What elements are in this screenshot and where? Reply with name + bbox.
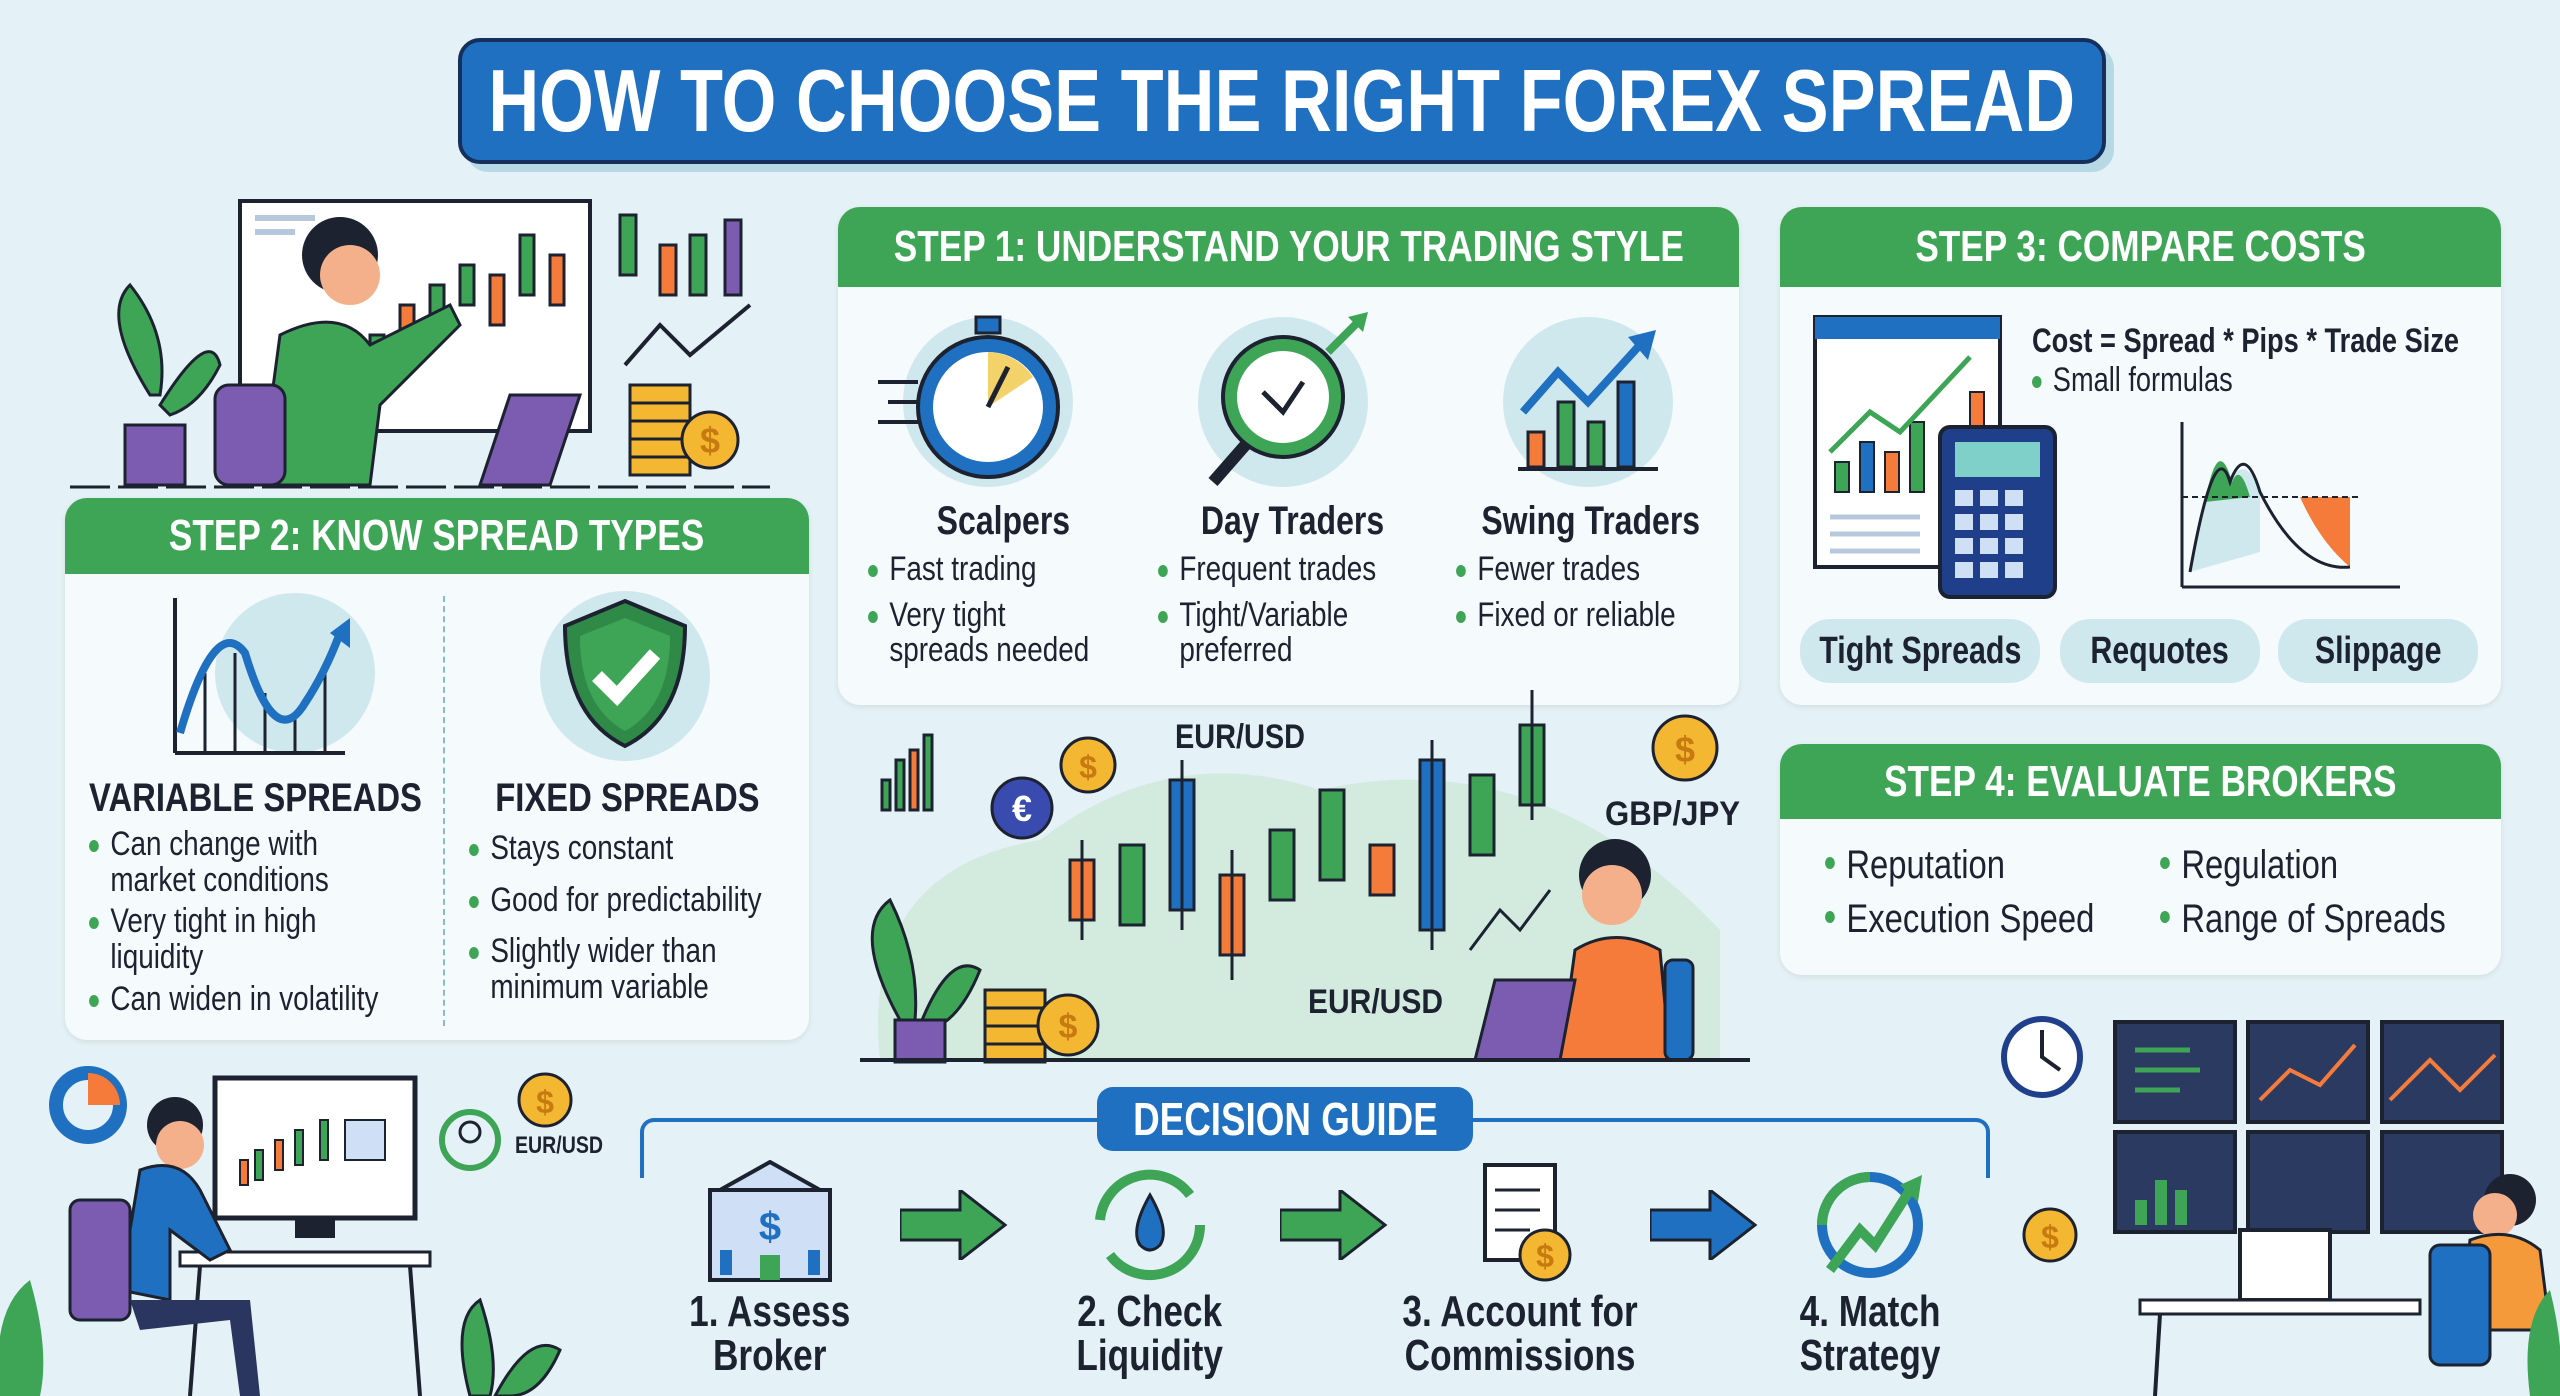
- step 1 header: STEP 1: UNDERSTAND YOUR TRADING STYLE: [893, 222, 1684, 271]
- text: day traders: Day Traders: [1201, 499, 1385, 543]
- icon: clock magnifier: [1198, 312, 1368, 487]
- illustration: central candlestick scene: $: [1675, 729, 1695, 770]
- text: variable spreads: [89, 776, 422, 1018]
- text: variable spreads: Can widen in volatility: [110, 980, 378, 1018]
- decision guide bracket: [640, 1118, 1990, 1178]
- pill: tight spreads: Tight Spreads: [1819, 630, 2021, 672]
- illustration: central candlestick scene: $: [1079, 749, 1097, 785]
- icon: fixed spread shield: [540, 591, 710, 761]
- title: HOW TO CHOOSE THE RIGHT FOREX SPREAD: [489, 51, 2075, 150]
- decision guide label: [1097, 1087, 1473, 1151]
- decision step 4 match strategy: [1800, 1172, 1940, 1380]
- text: fixed spreads: Good for predictability: [490, 881, 762, 919]
- pill: requotes: [2060, 619, 2260, 683]
- text: broker criteria: Reputation: [1846, 843, 2005, 887]
- pill: requotes: Requotes: [2091, 630, 2229, 672]
- step 3 header: STEP 3: COMPARE COSTS: [1915, 222, 2366, 271]
- text: cost formula: Cost = Spread * Pips * Trade Size: [2032, 322, 2459, 360]
- pill: tight spreads: [1800, 619, 2040, 683]
- text: cost formula: Small formulas: [2053, 361, 2233, 399]
- illustration: trader at chart board top-left: $: [700, 420, 720, 461]
- illustration: bottom-left trader at desk: $: [536, 1084, 554, 1120]
- illustration: central candlestick scene: [860, 690, 1750, 1064]
- pill: slippage: [2278, 619, 2478, 683]
- step 2 header: STEP 2: KNOW SPREAD TYPES: [169, 511, 705, 560]
- icon: dashboard and calculator: [1813, 315, 2057, 599]
- text: variable spreads: liquidity: [110, 938, 203, 976]
- text: scalpers: spreads needed: [889, 631, 1089, 669]
- text: variable spreads: VARIABLE SPREADS: [89, 776, 422, 820]
- decision step 1 assess broker: $: [759, 1205, 781, 1249]
- text: fixed spreads: Slightly wider than: [490, 932, 717, 970]
- decision step 3 account for commissions: $: [1536, 1238, 1554, 1274]
- text: cost formula: [2032, 322, 2459, 399]
- decision step 2 check liquidity: 2. Check: [1078, 1287, 1222, 1336]
- text: fixed spreads: Stays constant: [490, 829, 673, 867]
- decision step 2 check liquidity: [1077, 1170, 1223, 1380]
- text: scalpers: [868, 499, 1089, 669]
- text: day traders: Tight/Variable: [1179, 596, 1348, 634]
- text: scalpers: Very tight: [889, 596, 1006, 634]
- decision step 1 assess broker: 1. Assess: [689, 1287, 851, 1336]
- illustration: central candlestick scene: EUR/USD: [1308, 983, 1443, 1021]
- panel: step 2 spread types: [65, 498, 809, 1040]
- panel: step 3 compare costs: [1780, 207, 2501, 705]
- step 4 header: [1780, 744, 2501, 819]
- text: day traders: Frequent trades: [1179, 550, 1376, 588]
- icon: variable spread chart: [173, 593, 375, 755]
- illustration: bottom-right trader with monitors: $: [2041, 1219, 2059, 1255]
- icon: swing chart: [1503, 317, 1673, 487]
- text: broker criteria: Execution Speed: [1846, 897, 2094, 941]
- text: scalpers: Scalpers: [936, 499, 1070, 543]
- text: broker criteria: [1825, 843, 2446, 941]
- decision step 1 assess broker: [689, 1160, 851, 1380]
- arrow: [1280, 1190, 1388, 1260]
- illustration: central candlestick scene: €: [1012, 788, 1032, 829]
- decision step 1 assess broker: Broker: [713, 1331, 827, 1380]
- decision step 3 account for commissions: 3. Account for: [1402, 1287, 1638, 1336]
- icon: stopwatch: [878, 316, 1073, 487]
- text: fixed spreads: [469, 776, 762, 1006]
- step 2 header: [65, 498, 809, 574]
- text: scalpers: Fast trading: [889, 550, 1037, 588]
- text: day traders: [1158, 499, 1385, 669]
- text: day traders: preferred: [1179, 631, 1292, 669]
- pill: slippage: Slippage: [2315, 630, 2441, 672]
- text: broker criteria: Range of Spreads: [2181, 897, 2446, 941]
- step 4 header: STEP 4: EVALUATE BROKERS: [1884, 756, 2397, 806]
- text: variable spreads: market conditions: [110, 861, 329, 899]
- illustration: bottom-right trader with monitors: [2001, 1016, 2560, 1396]
- text: swing traders: Fewer trades: [1477, 550, 1640, 588]
- text: variable spreads: Very tight in high: [110, 902, 316, 940]
- illustration: central candlestick scene: GBP/JPY: [1605, 795, 1740, 833]
- arrow: [900, 1190, 1008, 1260]
- text: fixed spreads: FIXED SPREADS: [495, 776, 760, 820]
- decision step 4 match strategy: 4. Match: [1800, 1287, 1940, 1336]
- illustration: central candlestick scene: EUR/USD: [1175, 718, 1305, 756]
- arrow: [1650, 1190, 1758, 1260]
- illustration: trader at chart board top-left: [70, 199, 770, 488]
- decision step 2 check liquidity: Liquidity: [1077, 1331, 1223, 1380]
- text: variable spreads: Can change with: [110, 825, 318, 863]
- decision guide label: DECISION GUIDE: [1133, 1093, 1437, 1145]
- illustration: central candlestick scene: $: [1059, 1008, 1078, 1046]
- decision step 3 account for commissions: Commissions: [1405, 1331, 1635, 1380]
- text: swing traders: [1456, 499, 1700, 634]
- panel: step 1 trading style: [838, 207, 1739, 705]
- chart: slippage curve: [2180, 422, 2400, 588]
- text: swing traders: Swing Traders: [1482, 499, 1700, 543]
- step 1 header: [838, 207, 1739, 287]
- panel: step 4 evaluate brokers: [1780, 744, 2501, 975]
- step 3 header: [1780, 207, 2501, 287]
- illustration: bottom-left trader at desk: EUR/USD: [515, 1132, 603, 1159]
- illustration: bottom-left trader at desk: [0, 1066, 603, 1396]
- text: fixed spreads: minimum variable: [490, 968, 709, 1006]
- text: swing traders: Fixed or reliable: [1477, 596, 1676, 634]
- decision step 3 account for commissions: [1402, 1163, 1638, 1380]
- text: broker criteria: Regulation: [2181, 843, 2338, 887]
- decision step 4 match strategy: Strategy: [1800, 1331, 1940, 1380]
